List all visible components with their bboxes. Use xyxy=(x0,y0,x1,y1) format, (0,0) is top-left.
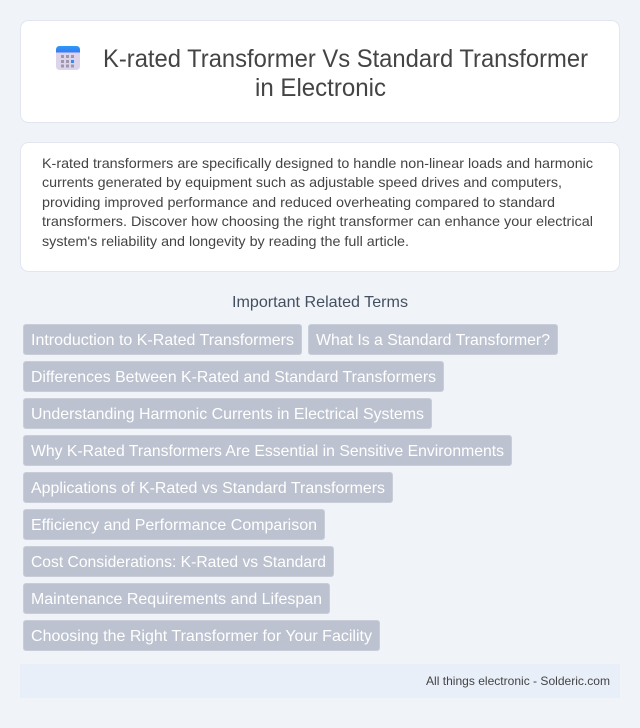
description text xyxy=(42,155,593,249)
panel: related terms chips xyxy=(24,324,558,650)
description text: K-rated transformers are specifically designed to handle non-linear loads and harmonic xyxy=(42,155,593,171)
chip xyxy=(308,324,558,354)
chip: What Is a Standard Transformer? xyxy=(316,332,550,349)
footer: All things electronic - Solderic.com xyxy=(426,674,610,688)
chip: Cost Considerations: K-Rated vs Standard xyxy=(31,554,326,571)
chip xyxy=(24,398,432,428)
chip xyxy=(24,324,302,354)
panel: description xyxy=(20,142,620,272)
chip: Maintenance Requirements and Lifespan xyxy=(31,591,322,608)
description text: transformers. Discover how choosing the right transformer can enhance your electrical xyxy=(42,213,593,229)
chip: Applications of K-Rated vs Standard Transformers xyxy=(31,480,385,497)
footer xyxy=(20,664,620,698)
chip: Understanding Harmonic Currents in Electrical Systems xyxy=(31,406,424,423)
chip xyxy=(24,362,444,392)
chip: Differences Between K-Rated and Standard Transformers xyxy=(31,369,436,386)
chip xyxy=(24,546,334,576)
chip: Introduction to K-Rated Transformers xyxy=(31,332,294,349)
chip: Why K-Rated Transformers Are Essential in Sensitive Environments xyxy=(31,443,504,460)
chip: Choosing the Right Transformer for Your Facility xyxy=(31,628,372,645)
chip xyxy=(24,472,392,502)
panel: title card xyxy=(20,20,620,122)
heading: important related terms: Important Related Terms xyxy=(232,294,408,311)
description text: currents generated by equipment such as adjustable speed drives and computers, xyxy=(42,174,562,190)
title: K-rated Transformer Vs Standard Transformer xyxy=(103,45,588,73)
title xyxy=(103,45,588,102)
chip xyxy=(24,584,330,614)
chip: Efficiency and Performance Comparison xyxy=(31,517,317,534)
description text: system's reliability and longevity by reading the full article. xyxy=(42,233,409,249)
chip xyxy=(24,510,324,540)
chip xyxy=(24,620,380,650)
chip xyxy=(24,436,512,466)
title: in Electronic xyxy=(255,74,386,102)
icon: calendar xyxy=(56,46,80,70)
description text: providing improved performance and reduced overheating compared to standard xyxy=(42,194,555,210)
